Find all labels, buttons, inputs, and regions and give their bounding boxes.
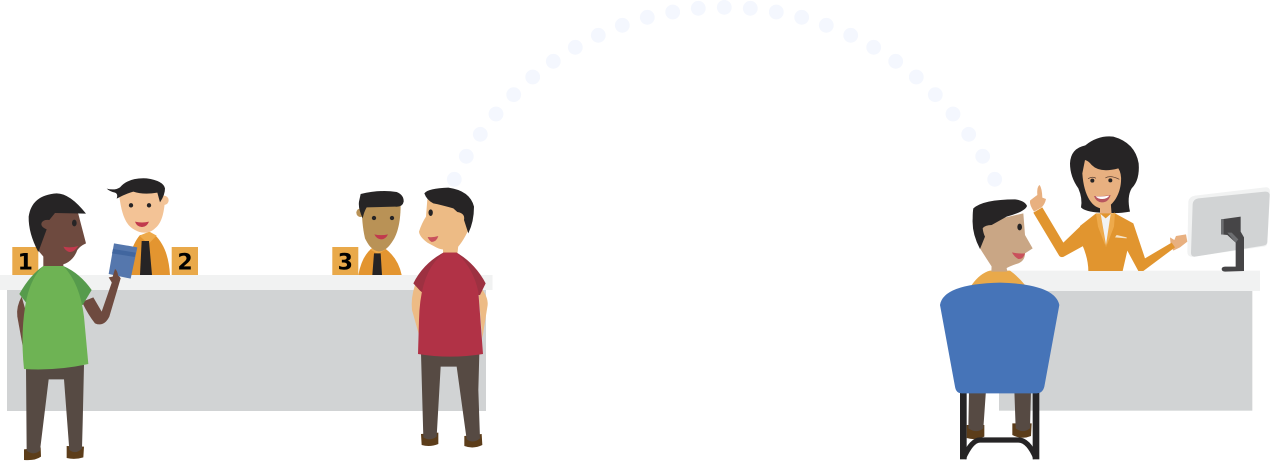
shoes	[421, 433, 482, 447]
shirt	[1101, 214, 1111, 245]
face	[37, 208, 86, 265]
shoes	[24, 446, 84, 460]
left arm	[17, 297, 28, 353]
arms	[412, 285, 488, 338]
neck	[1100, 202, 1112, 215]
customer in red shirt	[412, 188, 488, 447]
number sign 1: 1	[18, 250, 33, 276]
lapels	[1096, 213, 1115, 247]
neck	[43, 255, 63, 267]
trousers	[421, 353, 480, 441]
chair legs	[960, 392, 1039, 459]
raised hand	[1030, 185, 1046, 212]
right hand	[1170, 234, 1187, 251]
face	[1082, 160, 1121, 208]
hair	[424, 188, 474, 233]
number sign 2: 2	[177, 250, 193, 276]
shoes	[967, 423, 1032, 439]
clerk 2	[107, 178, 170, 275]
chair back	[940, 283, 1059, 393]
book	[109, 243, 137, 279]
dotted arc	[447, 0, 1002, 187]
face	[419, 199, 470, 250]
raised arm	[1033, 207, 1085, 257]
right arm and hand	[83, 269, 121, 324]
hair back	[1070, 136, 1139, 213]
neck	[443, 245, 458, 255]
number sign 2	[172, 247, 198, 276]
jacket and right arm	[1080, 213, 1175, 271]
hair	[973, 199, 1027, 249]
right counter	[999, 271, 1260, 411]
number sign 3	[332, 247, 358, 276]
customer in green shirt	[17, 193, 137, 460]
hair	[29, 193, 86, 252]
number sign 3: 3	[338, 250, 353, 276]
left counter	[0, 275, 492, 411]
seated customer and chair	[940, 199, 1059, 459]
red shirt	[413, 253, 486, 295]
clerk 3	[356, 191, 404, 275]
neck and face	[991, 265, 1007, 272]
trousers	[26, 365, 84, 453]
trousers	[968, 390, 1031, 431]
receptionist	[1030, 136, 1187, 271]
number sign 1	[12, 247, 38, 276]
monitor	[1187, 187, 1270, 272]
shoulders	[972, 271, 1025, 285]
green shirt	[19, 266, 92, 305]
